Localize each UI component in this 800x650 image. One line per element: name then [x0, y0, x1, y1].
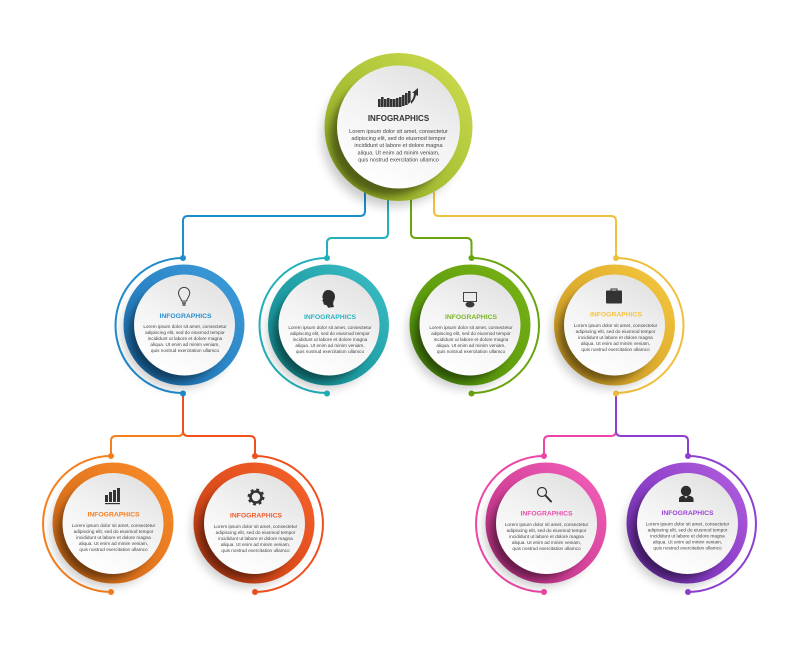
outer arc [688, 456, 756, 592]
body text: Lorem ipsum dolor sit amet, consectetur [349, 129, 448, 135]
body text: aliqua. Ut enim ad minim veniam, [150, 342, 220, 347]
node: pink [476, 453, 606, 595]
body text: Lorem ipsum dolor sit amet, consectetur [505, 522, 589, 527]
body text: adipiscing elit, sed do eiusmod tempor [290, 331, 370, 336]
body text: adipiscing elit, sed do eiusmod tempor [351, 136, 446, 142]
icon: light bulb [178, 287, 190, 305]
body text: quis nostrud exercitation ullamco [437, 349, 506, 354]
connector: yellow to pink [544, 394, 616, 456]
body text: Lorem ipsum dolor sit amet, consectetur [574, 323, 658, 328]
body text: adipiscing elit, sed do eiusmod tempor [216, 530, 296, 535]
body text: adipiscing elit, sed do eiusmod tempor [648, 528, 728, 532]
title: INFOGRAPHICS [368, 114, 430, 123]
body text: incididunt ut labore et dolore magna [293, 337, 368, 342]
body text [288, 325, 372, 354]
icon: monitor and hand [464, 292, 476, 308]
connector: top to blue [183, 193, 365, 258]
connector: yellow to purple [616, 394, 688, 456]
icon: bar chart [105, 488, 120, 504]
body text [214, 524, 298, 553]
body text: adipiscing elit, sed do eiusmod tempor [507, 528, 587, 533]
icon: head silhouette [322, 290, 335, 308]
body text: Lorem ipsum dolor sit amet, consectetur [143, 324, 227, 329]
body text: incididunt ut labore et dolore magna [650, 534, 725, 538]
title: INFOGRAPHICS [304, 314, 357, 321]
body text: Lorem ipsum dolor sit amet, consectetur [214, 524, 298, 529]
icon: magnifier [538, 488, 551, 502]
body text [646, 522, 730, 550]
node: green [408, 255, 539, 396]
body text: adipiscing elit, sed do eiusmod tempor [74, 529, 154, 534]
node: orange [43, 453, 173, 595]
body text [349, 129, 448, 164]
body text: aliqua. Ut enim ad minim veniam, [79, 541, 148, 546]
body text [429, 325, 513, 354]
icon: rising bar chart with arrow [378, 88, 418, 107]
icon: gear [248, 490, 264, 504]
node: red [192, 453, 323, 595]
icon: business person [679, 486, 694, 502]
body text: aliqua. Ut enim ad minim veniam, [436, 343, 506, 348]
connector: top to teal [327, 198, 388, 258]
body text: quis nostrud exercitation ullamco [653, 546, 722, 550]
body text: incididunt ut labore et dolore magna [354, 143, 444, 149]
node: yellow [552, 255, 684, 396]
body text [143, 324, 227, 353]
body text: Lorem ipsum dolor sit amet, consectetur [429, 325, 513, 330]
body text: incididunt ut labore et dolore magna [148, 336, 223, 341]
body text: Lorem ipsum dolor sit amet, consectetur [288, 325, 372, 330]
body text [72, 523, 156, 552]
body text: aliqua. Ut enim ad minim veniam, [221, 542, 290, 547]
body text: aliqua. Ut enim ad minim veniam, [581, 341, 650, 346]
top node [322, 53, 472, 207]
body text: quis nostrud exercitation ullamco [151, 348, 220, 353]
body text: aliqua. Ut enim ad minim veniam, [512, 540, 581, 545]
body text: adipiscing elit, sed do eiusmod tempor [431, 331, 511, 336]
outer arc [260, 258, 327, 393]
body text [574, 323, 658, 352]
icon: briefcase [606, 289, 622, 304]
connector: blue to red [183, 394, 255, 456]
body text: quis nostrud exercitation ullamco [358, 158, 439, 164]
outer arc [43, 456, 111, 592]
outer arc [255, 456, 323, 592]
outer arc [472, 258, 539, 393]
body text: quis nostrud exercitation ullamco [296, 349, 365, 354]
connector: top to green [411, 198, 472, 258]
body text: quis nostrud exercitation ullamco [79, 547, 148, 552]
body text: incididunt ut labore et dolore magna [218, 536, 293, 541]
body text [505, 522, 589, 551]
title: INFOGRAPHICS [445, 314, 498, 321]
body text: aliqua. Ut enim ad minim veniam, [295, 343, 365, 348]
connector: top to yellow [434, 193, 616, 258]
body text: incididunt ut labore et dolore magna [509, 534, 584, 539]
body text: quis nostrud exercitation ullamco [221, 548, 290, 553]
outer arc [116, 258, 183, 393]
title: INFOGRAPHICS [661, 510, 714, 517]
body text: adipiscing elit, sed do eiusmod tempor [145, 330, 225, 335]
body text: incididunt ut labore et dolore magna [76, 535, 151, 540]
title: INFOGRAPHICS [230, 512, 283, 520]
outer arc [476, 456, 544, 592]
body text: incididunt ut labore et dolore magna [578, 335, 653, 340]
body text: Lorem ipsum dolor sit amet, consectetur [646, 522, 730, 526]
connector: blue to orange [111, 394, 183, 456]
body text: quis nostrud exercitation ullamco [512, 546, 581, 551]
title: INFOGRAPHICS [590, 312, 643, 318]
body text: aliqua. Ut enim ad minim veniam, [653, 540, 722, 544]
body text: quis nostrud exercitation ullamco [581, 347, 650, 352]
title: INFOGRAPHICS [87, 512, 140, 518]
node: purple [625, 453, 756, 595]
node: teal [260, 255, 389, 396]
node: blue [116, 255, 244, 396]
body text: adipiscing elit, sed do eiusmod tempor [576, 329, 656, 334]
title: INFOGRAPHICS [159, 313, 212, 320]
body text: Lorem ipsum dolor sit amet, consectetur [72, 523, 156, 528]
title: INFOGRAPHICS [520, 510, 573, 518]
outer arc [616, 258, 684, 393]
body text: aliqua. Ut enim ad minim veniam, [357, 150, 440, 156]
body text: incididunt ut labore et dolore magna [434, 337, 509, 342]
